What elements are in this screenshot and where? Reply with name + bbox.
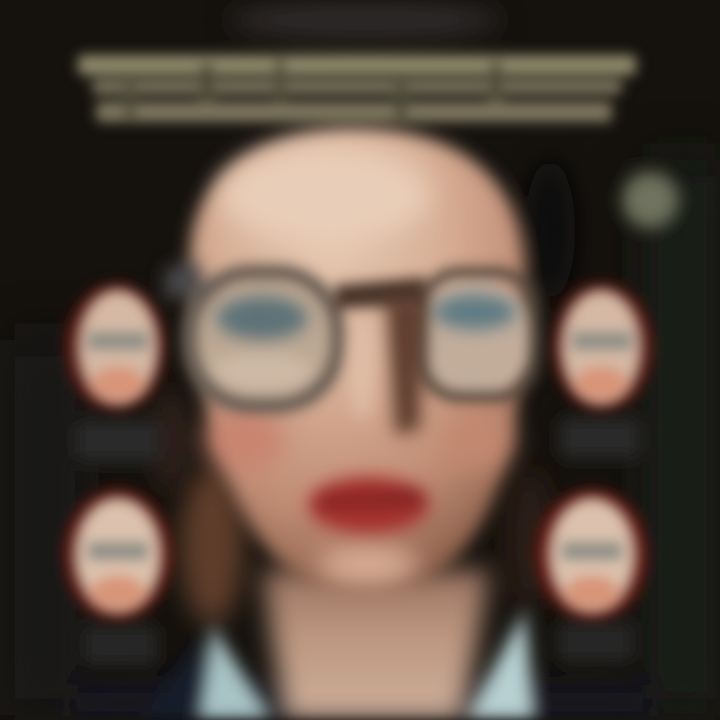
- portrait: lower right: [537, 489, 647, 621]
- title: illegible blurred text lines: [78, 55, 636, 122]
- nose shadow: [385, 300, 425, 435]
- background side panels: [15, 160, 715, 715]
- caption: upper right: [560, 418, 640, 458]
- left lens: [190, 272, 338, 406]
- forehead highlight: [220, 147, 430, 243]
- temple arm: [165, 262, 205, 300]
- left nose light: [350, 320, 374, 420]
- chin highlight: [318, 545, 418, 585]
- glasses: [165, 262, 535, 435]
- right lens: [415, 272, 535, 397]
- neck: [262, 570, 490, 720]
- portrait: lower left: [64, 489, 172, 621]
- face: [190, 128, 525, 594]
- cheek blush: [205, 410, 513, 470]
- badge circle: [622, 172, 678, 228]
- caption: upper left: [75, 420, 160, 462]
- bridge: [335, 276, 425, 310]
- caption: lower right: [558, 622, 633, 662]
- suit jacket and shirt collar: [70, 610, 650, 720]
- portrait: upper right: [552, 283, 652, 411]
- portrait: upper left: [66, 283, 166, 411]
- caption: lower left: [82, 625, 157, 665]
- hair: [152, 0, 575, 625]
- lips: [308, 476, 428, 534]
